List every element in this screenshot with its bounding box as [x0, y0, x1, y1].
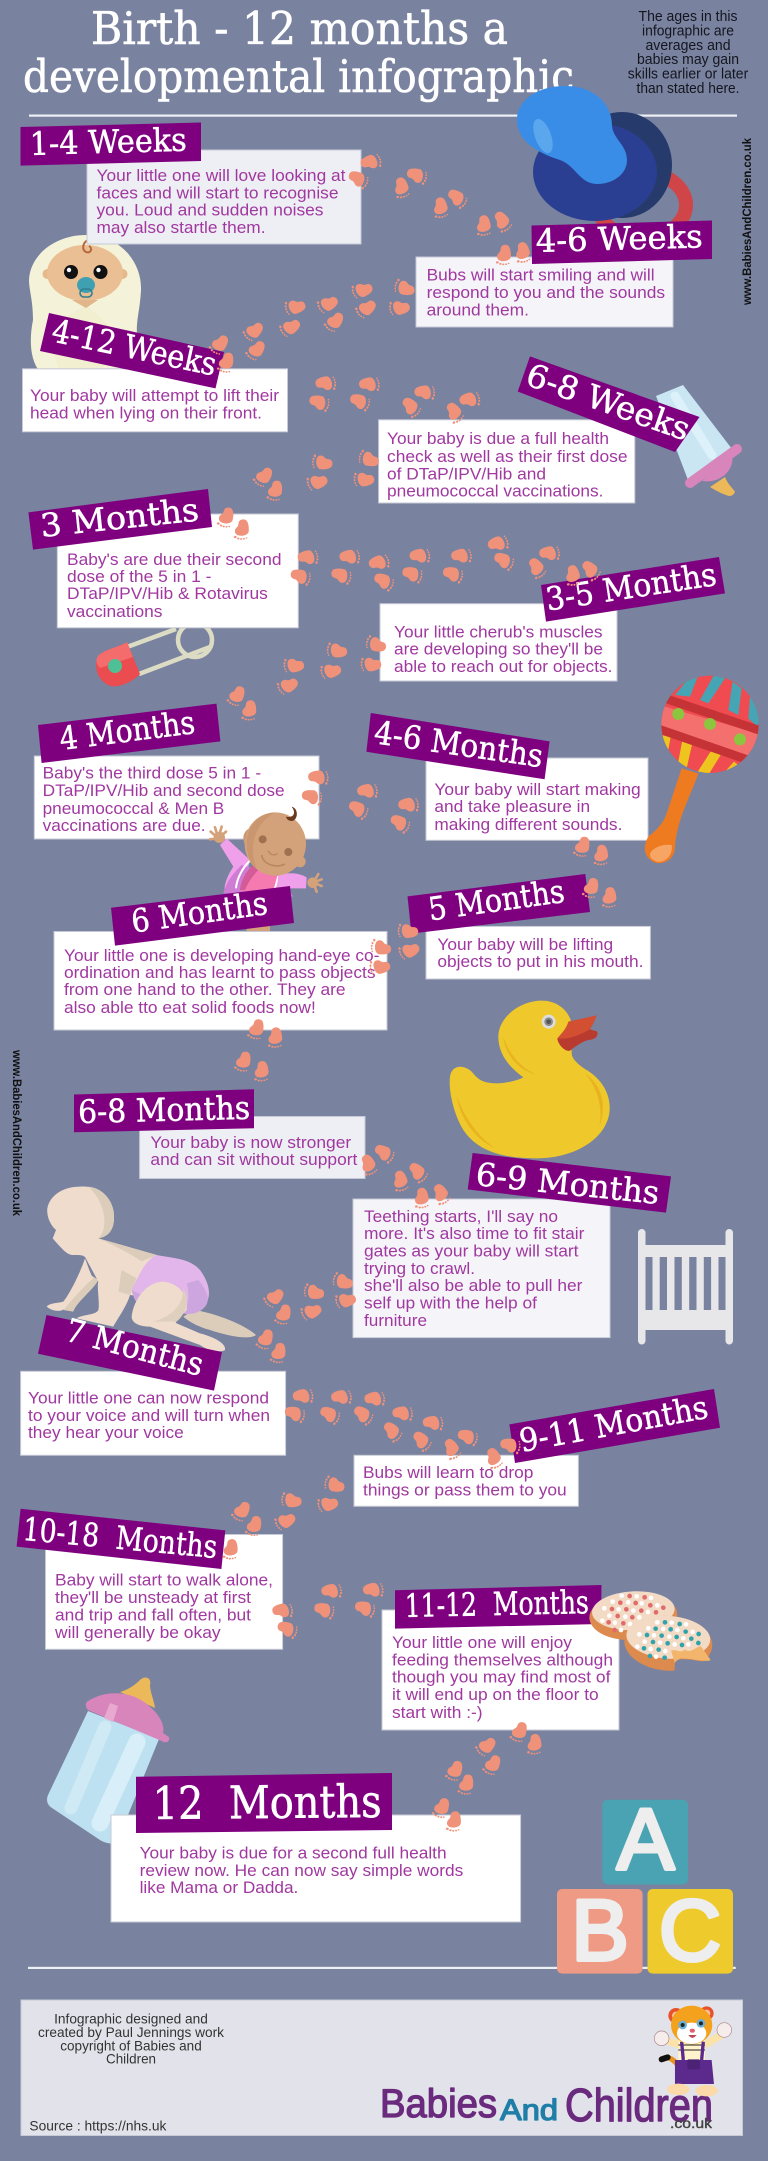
panel: 6 months: ordination and has learnt to pass objects — [64, 963, 376, 982]
panel: 6-9 months: furniture — [364, 1311, 427, 1330]
footprints: 4-12 weeks to 6-8 weeks — [308, 375, 482, 426]
panel: 3 months: Baby's are due their second — [67, 550, 282, 569]
icon: swaddled baby — [29, 235, 142, 372]
note: ages are averages: averages and — [646, 38, 730, 54]
panel: 7 months: to your voice and will turn when — [28, 1406, 270, 1425]
panel: 6-8 weeks: pneumococcal vaccinations. — [387, 482, 604, 501]
note: ages are averages: babies may gain — [637, 52, 739, 68]
panel: 1-4 weeks: Your little one will love looking at — [96, 166, 346, 185]
icon: baby girl — [210, 807, 322, 937]
panel: 6 months: from one hand to the other. They are — [64, 980, 346, 999]
panel: 4-12 weeks: Your baby will attempt to lift their — [30, 386, 279, 405]
logo: Babies And Children: .co.uk — [670, 2115, 713, 2131]
panel: 6-8 weeks: of DTaP/IPV/Hib and — [387, 464, 546, 483]
heading: 6-8 Months: 6-8 Months — [78, 1089, 251, 1131]
heading: 4-6 Weeks: 4-6 Weeks — [535, 217, 703, 260]
footprints: 3 months to 3-5 months — [289, 534, 603, 593]
panel: 3 months: dose of the 5 in 1 - — [67, 567, 212, 586]
icon: ABC blocks: A — [617, 1792, 675, 1888]
icon: cookies — [588, 1589, 717, 1680]
panel: 9-11 months — [354, 1388, 720, 1506]
footprints: 11-12 months to 12 months — [431, 1720, 542, 1832]
heading: 7 Months: 7 Months — [62, 1311, 208, 1384]
panel: 1-4 weeks: may also startle them. — [96, 218, 266, 237]
heading: 3 Months: 3 Months — [38, 491, 201, 545]
panel: 9-11 months: Bubs will learn to drop — [363, 1463, 533, 1482]
panel: 10-18 months: will generally be okay — [54, 1623, 221, 1642]
icon: tiger mascot — [654, 2006, 732, 2096]
footprints: 4 months to 4-6 months — [301, 770, 420, 835]
panel: 6-9 months: she'll also be able to pull her — [364, 1276, 583, 1295]
heading: 12 Months: 12 Months — [152, 1775, 382, 1830]
logo: Babies And Children: Children — [565, 2079, 713, 2131]
heading: 6 Months: 6 Months — [129, 884, 270, 941]
panel: 4-6 weeks — [416, 217, 712, 327]
panel: 6-8 months: and can sit without support — [150, 1150, 358, 1169]
heading: 4 Months: 4 Months — [57, 703, 197, 758]
footprints: 6-9 months to 7 months — [255, 1272, 358, 1364]
icon: crawling baby — [47, 1187, 256, 1351]
panel: 6-8 months: Your baby is now stronger — [150, 1133, 352, 1152]
panel: 4 months: vaccinations are due. — [43, 816, 206, 835]
footprints: 4-6 weeks to 4-12 weeks — [207, 278, 416, 374]
icon: small baby bottle — [656, 385, 737, 496]
panel: footer — [21, 2000, 742, 2136]
panel: 3-5 months: are developing so they'll be — [394, 640, 603, 659]
heading: 6-8 Weeks: 6-8 Weeks — [521, 356, 695, 448]
panel: 12 months: Your baby is due for a second full health — [140, 1844, 447, 1863]
heading: 5 Months: 5 Months — [426, 872, 567, 928]
panel: 11-12 months: feeding themselves although — [392, 1650, 613, 1670]
credit text: Children — [106, 2050, 156, 2066]
panel: 7 months: Your little one can now respond — [28, 1389, 269, 1408]
logo: Babies And Children: Babies — [380, 2082, 497, 2126]
heading: 9-11 Months: 9-11 Months — [516, 1388, 711, 1460]
panel: 3 months — [28, 489, 298, 628]
footprints: 10-18 months to 11-12 months — [271, 1581, 385, 1640]
panel: 12 months: review now. He can now say simple words — [140, 1861, 463, 1880]
panel: 4-6 weeks: Bubs will start smiling and will — [427, 266, 655, 285]
panel: 7 months — [21, 1311, 286, 1455]
title — [23, 2, 574, 103]
website url vertical right: www.BabiesAndChildren.co.uk — [740, 138, 754, 306]
note: ages are averages — [628, 9, 748, 97]
panel: 6-9 months: trying to crawl. — [364, 1259, 475, 1278]
panel: 6-9 months — [353, 1153, 671, 1338]
panel: 6 months — [54, 884, 387, 1030]
panel: 6-8 months — [74, 1089, 365, 1178]
icon: rattle — [645, 673, 763, 863]
panel: 4 months: pneumococcal & Men B — [43, 799, 224, 818]
title: Birth - 12 months a — [91, 2, 508, 55]
panel: 11-12 months: start with :-) — [392, 1703, 483, 1722]
panel: 10-18 months: Baby will start to walk alone, — [55, 1570, 273, 1590]
panel: 6 months: Your little one is developing hand-eye co- — [64, 946, 379, 965]
panel: 6 months: also able tto eat solid foods now! — [64, 998, 316, 1017]
panel: 5 months — [408, 872, 650, 979]
footprints: 3-5 months to 4 months — [226, 635, 388, 721]
panel: 3-5 months: Your little cherub's muscles — [394, 622, 603, 642]
icon: rubber duck — [450, 1001, 610, 1158]
panel: 12 months — [111, 1773, 521, 1922]
panel: 6-8 weeks: check as well as their first dose — [387, 447, 628, 466]
logo: Babies And Children: And — [500, 2094, 558, 2127]
note: ages are averages: skills earlier or later — [628, 66, 748, 82]
credit text: created by Paul Jennings work — [38, 2024, 225, 2040]
footprints: 9-11 months to 10-18 months — [223, 1475, 346, 1560]
footprints: 1-4 weeks to 4-6 weeks — [346, 152, 532, 265]
website url vertical left: www.BabiesAndChildren.co.uk — [10, 1049, 24, 1216]
panel: 3 months: vaccinations — [67, 602, 162, 621]
panel: 4 months: DTaP/IPV/Hib and second dose — [43, 781, 285, 800]
panel: 1-4 weeks: faces and will start to recognise — [96, 183, 338, 202]
panel: 4-6 weeks: around them. — [427, 300, 529, 319]
footprints: 4-6 months to 5 months — [572, 835, 617, 908]
footprints: 6-8 weeks to 3 months — [216, 449, 380, 540]
credit text: copyright of Babies and — [60, 2037, 202, 2053]
heading: 6-9 Months: 6-9 Months — [474, 1155, 661, 1212]
panel: 10-18 months — [17, 1509, 283, 1649]
panel: 1-4 weeks — [20, 121, 361, 244]
heading: 11-12 Months: 11-12 Months — [404, 1583, 589, 1625]
panel: 11-12 months: it will end up on the floor to — [392, 1685, 599, 1704]
heading: 3-5 Months: 3-5 Months — [543, 555, 719, 619]
footprints: 7 months to 9-11 months — [283, 1388, 521, 1471]
panel: 4 months — [34, 703, 319, 839]
panel: 4 months: Baby's the third dose 5 in 1 - — [43, 764, 261, 783]
panel: 10-18 months: and trip and fall often, but — [55, 1606, 251, 1624]
heading: 1-4 Weeks: 1-4 Weeks — [29, 121, 187, 163]
icon: pacifier — [517, 86, 686, 238]
panel: 4-6 months — [366, 713, 648, 840]
panel: 3-5 months: able to reach out for objects. — [394, 657, 612, 676]
panel: 7 months: they hear your voice — [28, 1423, 184, 1442]
icon: ABC blocks: B — [571, 1883, 629, 1979]
panel: 4-6 months: and take pleasure in — [434, 797, 590, 816]
footprints: 6 months to 6-8 months — [234, 1018, 283, 1082]
panel: 10-18 months: they'll be unsteady at first — [55, 1588, 251, 1607]
icon: ABC blocks: C — [659, 1883, 721, 1979]
panel: 3 months: DTaP/IPV/Hib & Rotavirus — [67, 584, 268, 603]
panel: 4-6 months: making different sounds. — [434, 815, 622, 834]
heading: 10-18 Months: 10-18 Months — [21, 1510, 219, 1566]
source: Source : https://nhs.uk — [29, 2118, 167, 2134]
panel: 4-12 weeks — [22, 312, 288, 432]
panel: 5 months: objects to put in his mouth. — [437, 952, 643, 971]
panel: 5 months: Your baby will be lifting — [437, 935, 613, 954]
panel: 6-9 months: more. It's also time to fit stair — [364, 1224, 585, 1243]
logo: Babies And Children — [380, 2079, 713, 2131]
credit text: Infographic designed and — [54, 2011, 208, 2027]
panel: 6-8 weeks: Your baby is due a full health — [387, 429, 609, 448]
heading: 4-6 Months: 4-6 Months — [372, 713, 546, 775]
note: ages are averages: The ages in this — [638, 9, 738, 25]
note: ages are averages: infographic are — [642, 24, 734, 40]
icon: cot — [638, 1229, 733, 1344]
panel: 11-12 months — [382, 1583, 619, 1730]
note: ages are averages: than stated here. — [636, 81, 740, 97]
footprints: 6-8 months to 6-9 months — [356, 1143, 453, 1210]
panel: 11-12 months: Your little one will enjoy — [392, 1633, 573, 1652]
credit text — [38, 2011, 225, 2066]
heading: 4-12 Weeks: 4-12 Weeks — [49, 312, 220, 384]
panel: 12 months: like Mama or Dadda. — [140, 1878, 298, 1897]
panel: 9-11 months: things or pass them to you — [363, 1481, 567, 1500]
panel: 6-9 months: self up with the help of — [364, 1294, 537, 1313]
panel: 3-5 months — [380, 555, 725, 681]
panel: 4-12 weeks: head when lying on their front. — [30, 404, 262, 423]
icon: large baby bottle — [47, 1678, 169, 1843]
icon: ABC blocks — [557, 1792, 733, 1979]
panel: 6-8 weeks — [379, 356, 700, 503]
panel: 11-12 months: though you may find most of — [392, 1668, 611, 1687]
panel: 4-6 months: Your baby will start making — [434, 780, 641, 799]
panel: 6-9 months: gates as your baby will start — [364, 1241, 579, 1260]
icon: safety pin — [96, 623, 212, 686]
panel: 6-9 months: Teething starts, I'll say no — [364, 1207, 558, 1226]
panel: 4-6 weeks: respond to you and the sounds — [427, 283, 665, 302]
footprints: 5 months to 6 months — [368, 922, 422, 976]
panel: 1-4 weeks: you. Loud and sudden noises — [96, 200, 324, 220]
title: developmental infographic — [23, 50, 574, 103]
